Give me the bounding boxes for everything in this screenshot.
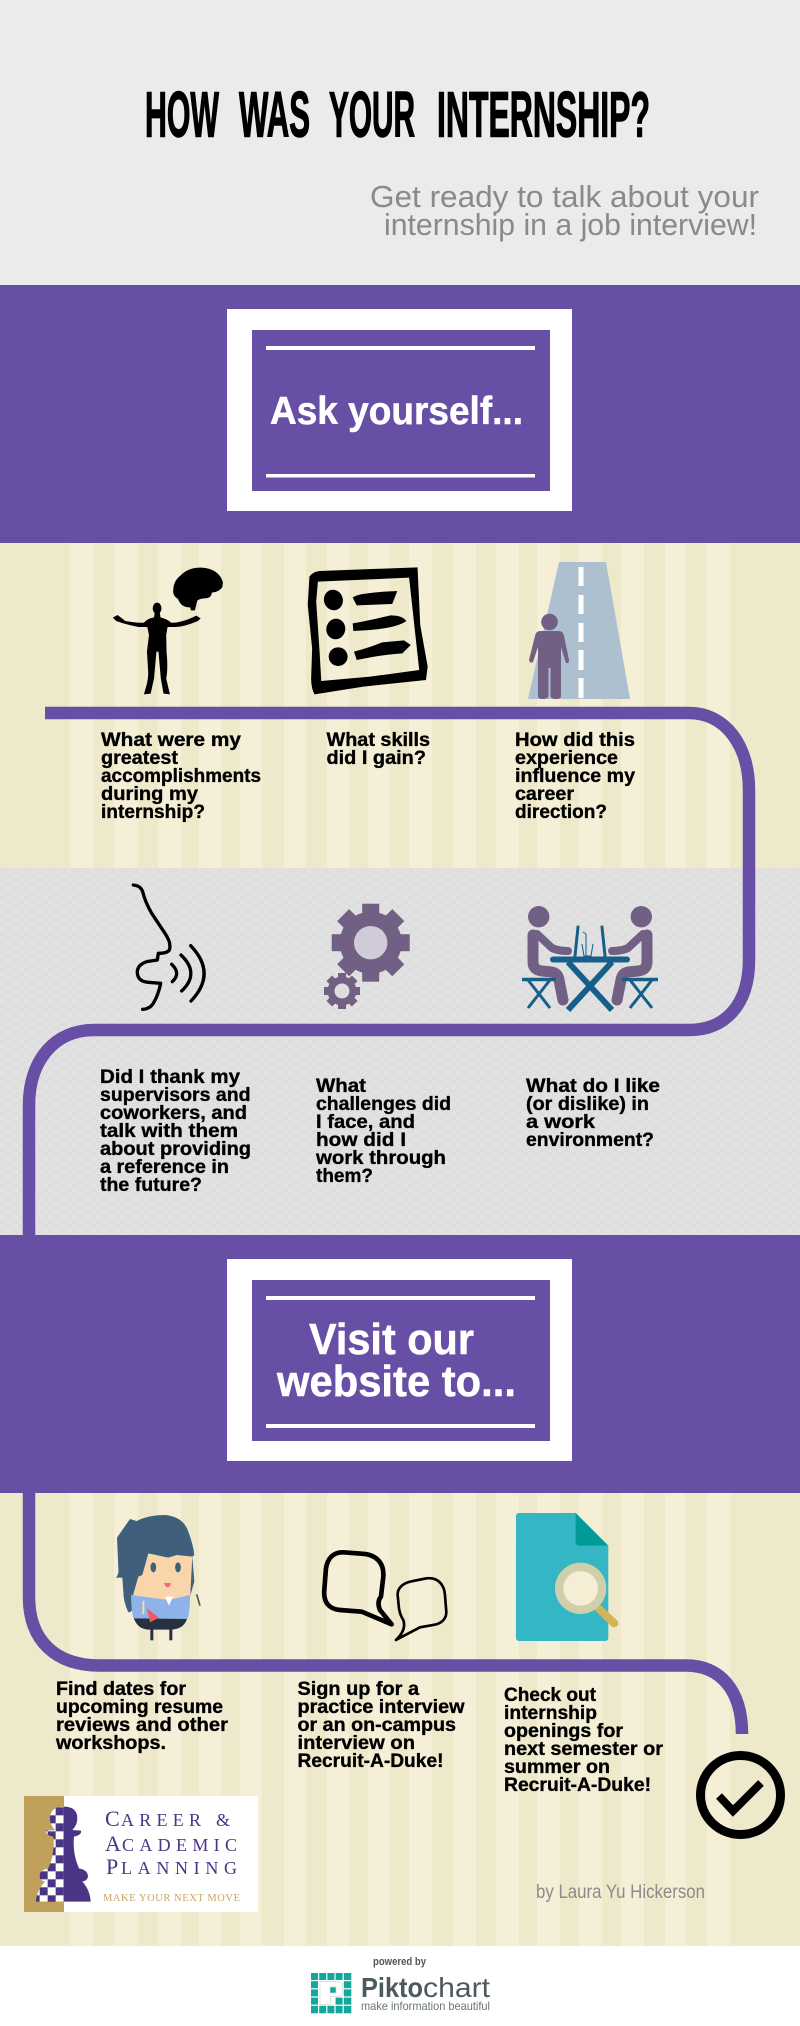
question: work environment: a work (526, 1112, 595, 1133)
question: career direction: direction? (515, 802, 607, 823)
icon: two people at a table (522, 906, 658, 1010)
question: thank supervisors: supervisors and (100, 1085, 250, 1106)
logo text: C (105, 1806, 120, 1831)
text: check out openings: internship (504, 1703, 597, 1724)
icon: speaking face profile (133, 885, 204, 1009)
text: sign up: interview on (298, 1733, 415, 1754)
text: sign up: practice interview (298, 1697, 465, 1718)
question: accomplishments: What were my (101, 730, 241, 751)
panel: visit our website banner (0, 1235, 800, 1493)
question: challenges: What (316, 1076, 367, 1097)
title: HOW (145, 78, 219, 150)
subtitle: internship in a job interview! (384, 207, 757, 242)
text: find dates (55, 1679, 229, 1754)
text: sign up: Recruit-A-Duke! (298, 1751, 444, 1772)
question: challenges: work through (315, 1148, 446, 1169)
question: thank supervisors: talk with them (100, 1121, 238, 1142)
icon: piktochart mark (311, 1973, 351, 2013)
arrow: winding purple timeline (29, 713, 749, 1734)
logo text: A (105, 1831, 121, 1856)
text: find dates: Find dates for (56, 1679, 187, 1700)
question: challenges: them? (316, 1166, 373, 1187)
question: career direction: experience (515, 748, 618, 769)
text: check out openings: Check out (504, 1685, 597, 1706)
question: skills (326, 730, 430, 769)
panel: beige website row (0, 1493, 800, 1946)
text: sign up: Sign up for a (298, 1679, 419, 1700)
question: thank supervisors (100, 1067, 251, 1196)
icon: document with magnifier (516, 1513, 614, 1641)
question: thank supervisors: about providing (100, 1139, 251, 1160)
logo text: AREER & (121, 1810, 230, 1830)
question: career direction: influence my (515, 766, 635, 787)
panel: beige questions row one (0, 543, 800, 868)
footer: powered by piktochart (0, 1946, 800, 2026)
question: skills: What skills (326, 730, 430, 751)
panel: grey questions row two (0, 868, 800, 1235)
subtitle (370, 179, 759, 242)
question: thank supervisors: Did I thank my (100, 1067, 240, 1088)
question: career direction: career (515, 784, 575, 805)
logo text (103, 1806, 240, 1904)
text: find dates: reviews and other (56, 1715, 229, 1736)
logo text: MAKE YOUR NEXT MOVE (103, 1893, 240, 1904)
panel: ask yourself banner (0, 285, 800, 543)
icon: gears (324, 904, 410, 1009)
question: work environment (526, 1076, 660, 1151)
question: thank supervisors: coworkers, and (100, 1103, 247, 1124)
icon: chess pawn (36, 1807, 91, 1902)
text: find dates: workshops. (55, 1733, 166, 1754)
piktochart wordmark: make information beautiful (361, 1999, 490, 2013)
text: check out openings: openings for (504, 1721, 624, 1742)
powered by text: powered by (373, 1956, 427, 1968)
logo: career and academic planning (24, 1796, 258, 1912)
icon: person with brain (113, 568, 223, 694)
question: thank supervisors: a reference in (100, 1157, 229, 1178)
question: challenges: I face, and (316, 1112, 415, 1133)
question: accomplishments: internship? (101, 802, 205, 823)
icon: road with person (528, 562, 630, 699)
heading: ask yourself: Ask yourself... (270, 390, 523, 433)
text: find dates: upcoming resume (56, 1697, 223, 1718)
title (145, 78, 650, 150)
credit: by Laura Yu Hickerson (536, 1882, 705, 1903)
text: check out openings: next semester or (504, 1739, 664, 1760)
question: career direction (515, 730, 635, 823)
icon: speech bubbles (324, 1552, 446, 1640)
logo text: LANNING (121, 1858, 237, 1878)
icon: checklist (308, 567, 428, 694)
logo text: P (106, 1854, 118, 1879)
question: work environment: (or dislike) in (526, 1094, 649, 1115)
question: accomplishments (101, 730, 261, 823)
text: sign up (298, 1679, 465, 1772)
text: check out openings (504, 1685, 664, 1796)
question: work environment: What do I like (526, 1076, 660, 1097)
title: WAS (239, 78, 310, 150)
question: challenges: challenges did (316, 1094, 451, 1115)
question: skills: did I gain? (326, 748, 426, 769)
question: work environment: environment? (526, 1130, 654, 1151)
header panel (0, 0, 800, 285)
question: challenges: how did I (316, 1130, 406, 1151)
piktochart wordmark: Pikto (361, 1972, 423, 2003)
icon: check mark circle (700, 1756, 780, 1834)
question: accomplishments: accomplishments (101, 766, 261, 787)
text: check out openings: Recruit-A-Duke! (504, 1775, 651, 1796)
heading: visit our website: Visit our (309, 1315, 474, 1364)
text: check out openings: summer on (504, 1757, 610, 1778)
heading: visit our website (276, 1315, 516, 1406)
piktochart wordmark (361, 1972, 490, 2013)
question: thank supervisors: the future? (100, 1175, 202, 1196)
logo text: CADEMIC (122, 1835, 237, 1855)
question: accomplishments: greatest (101, 748, 179, 769)
piktochart wordmark: chart (423, 1972, 490, 2003)
text: sign up: or an on-campus (298, 1715, 456, 1736)
question: challenges (315, 1076, 451, 1187)
heading: visit our website: website to... (276, 1357, 516, 1406)
icon: cartoon woman (116, 1515, 200, 1640)
question: career direction: How did this (515, 730, 635, 751)
title: YOUR (329, 78, 415, 150)
subtitle: Get ready to talk about your (370, 179, 759, 214)
question: accomplishments: during my (101, 784, 198, 805)
